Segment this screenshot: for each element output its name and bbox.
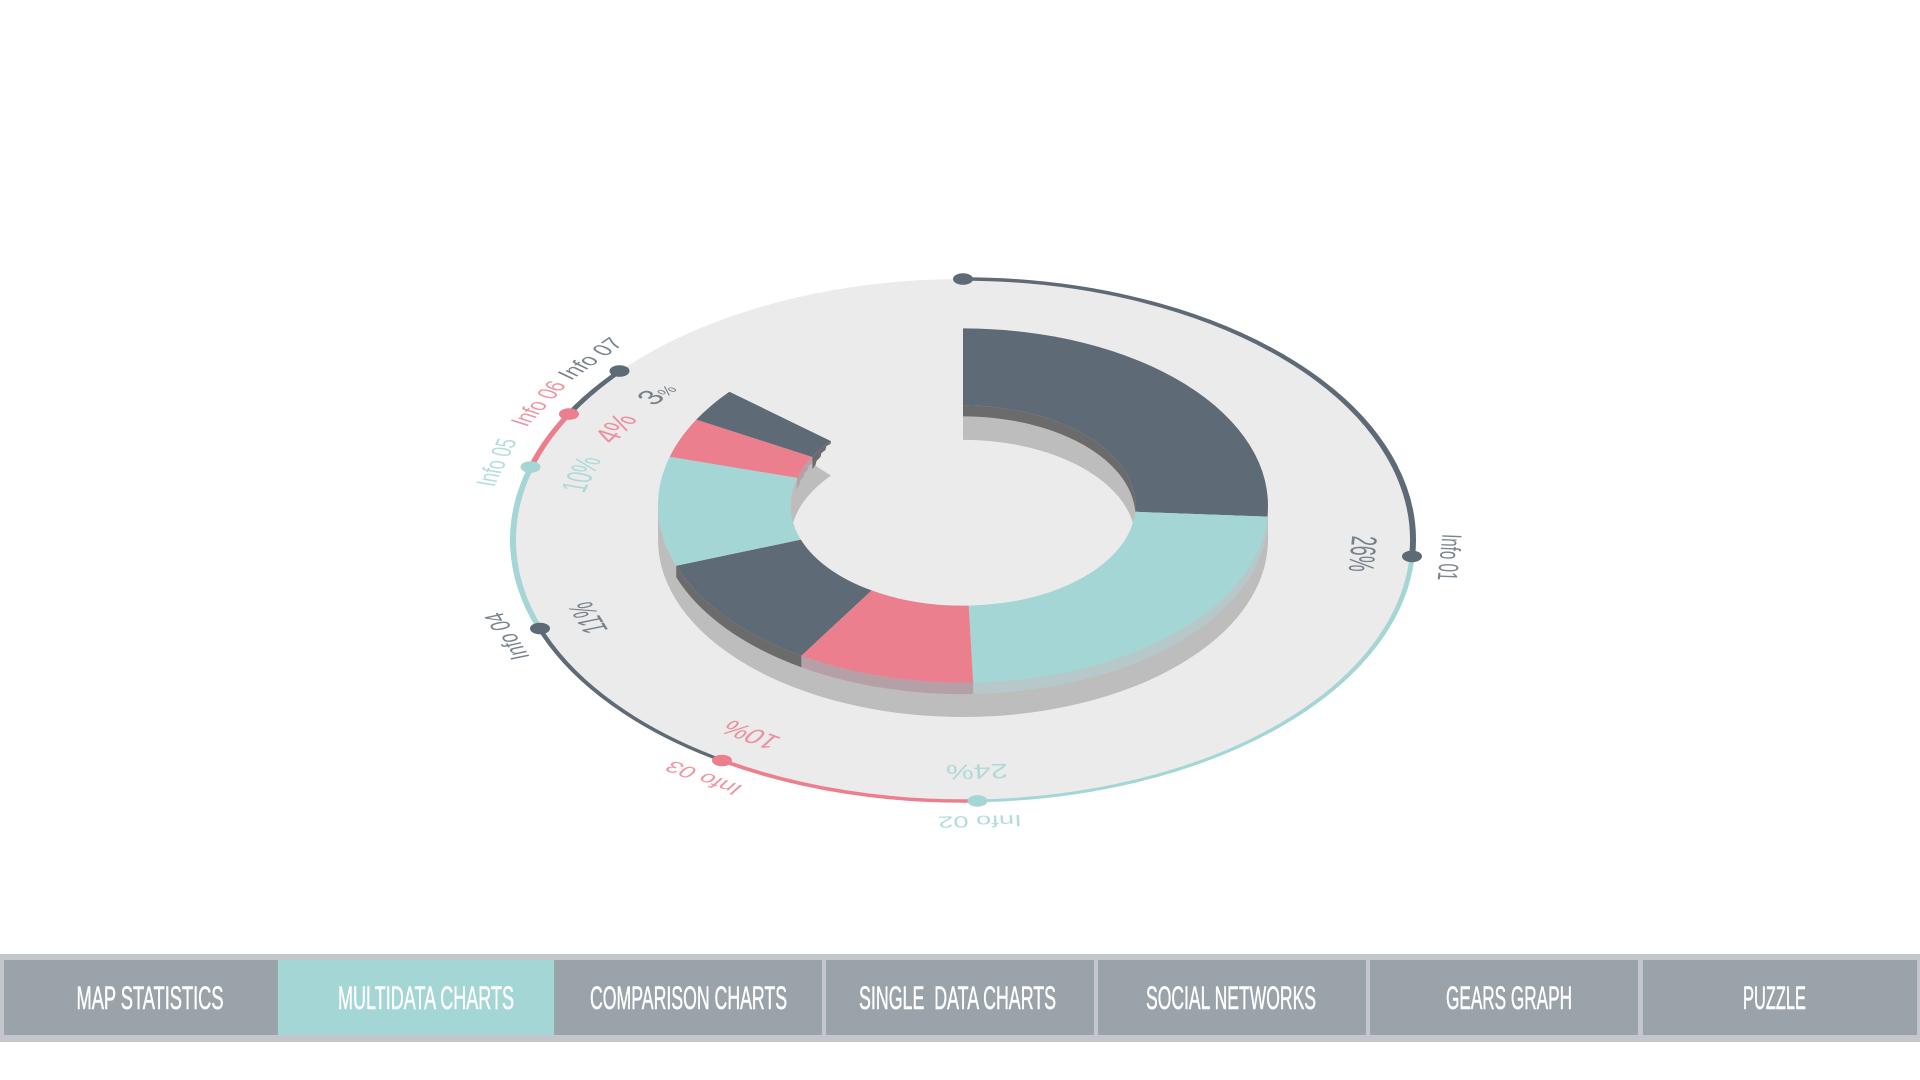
segment side walls bbox=[676, 405, 1267, 694]
info labels: Info 06 bbox=[504, 378, 572, 429]
donut top segments bbox=[658, 328, 1268, 683]
info labels: Info 02 bbox=[938, 811, 1022, 832]
tab: gears graph bbox=[1370, 960, 1638, 1035]
donut base extrusion bbox=[658, 405, 1268, 717]
tab: gears graph: GEARS GRAPH bbox=[1446, 980, 1572, 1016]
tab: single data charts bbox=[826, 960, 1094, 1035]
tab: map statistics: MAP STATISTICS bbox=[76, 980, 224, 1016]
tab: social networks bbox=[1098, 960, 1366, 1035]
percentage labels: 3% bbox=[629, 378, 684, 410]
isometric donut chart bbox=[469, 273, 1468, 832]
segment: info 02, 24% bbox=[969, 512, 1267, 682]
tab: multidata charts (active) bbox=[278, 960, 554, 1035]
rim markers bbox=[520, 273, 1422, 807]
percentage labels: 24% bbox=[945, 759, 1009, 783]
info labels: Info 07 bbox=[551, 334, 629, 383]
rim arcs bbox=[513, 279, 1413, 801]
percentage labels: 11% bbox=[560, 599, 617, 636]
percentage labels: 10% bbox=[715, 715, 787, 754]
percentage labels: 10% bbox=[553, 454, 610, 495]
info labels: Info 04 bbox=[477, 610, 536, 662]
tab: single data charts: SINGLE DATA CHARTS bbox=[859, 980, 1056, 1016]
percentage labels: 26% bbox=[1340, 535, 1384, 572]
segment: info 01, 26% bbox=[963, 328, 1268, 517]
donut body bbox=[658, 328, 1268, 717]
tab: comparison charts bbox=[554, 960, 822, 1035]
plane-projected rim arcs and labels bbox=[469, 279, 1468, 832]
tab: social networks: SOCIAL NETWORKS bbox=[1146, 980, 1316, 1016]
percentage labels: 4% bbox=[586, 410, 646, 447]
percentage labels bbox=[553, 378, 1384, 783]
info labels: Info 01 bbox=[1432, 534, 1468, 581]
tab: map statistics bbox=[4, 960, 278, 1035]
tab: comparison charts: COMPARISON CHARTS bbox=[590, 980, 787, 1016]
tab: puzzle bbox=[1643, 960, 1917, 1035]
info labels: Info 05 bbox=[469, 436, 523, 488]
tab: puzzle: PUZZLE bbox=[1743, 980, 1806, 1016]
info labels: Info 03 bbox=[660, 757, 747, 799]
segment: info 03, 10% bbox=[801, 590, 973, 683]
segment: info 07, 3% bbox=[696, 392, 831, 457]
nav background bbox=[0, 954, 1920, 1042]
segment: info 05, 10% bbox=[658, 457, 801, 566]
segment: info 06, 4% bbox=[670, 420, 812, 478]
tab: multidata charts (active): MULTIDATA CHARTS bbox=[338, 980, 514, 1016]
info labels bbox=[469, 334, 1468, 832]
base disc bbox=[513, 279, 1413, 801]
segment: info 04, 11% bbox=[676, 540, 872, 656]
navigation bar bbox=[0, 954, 1920, 1042]
